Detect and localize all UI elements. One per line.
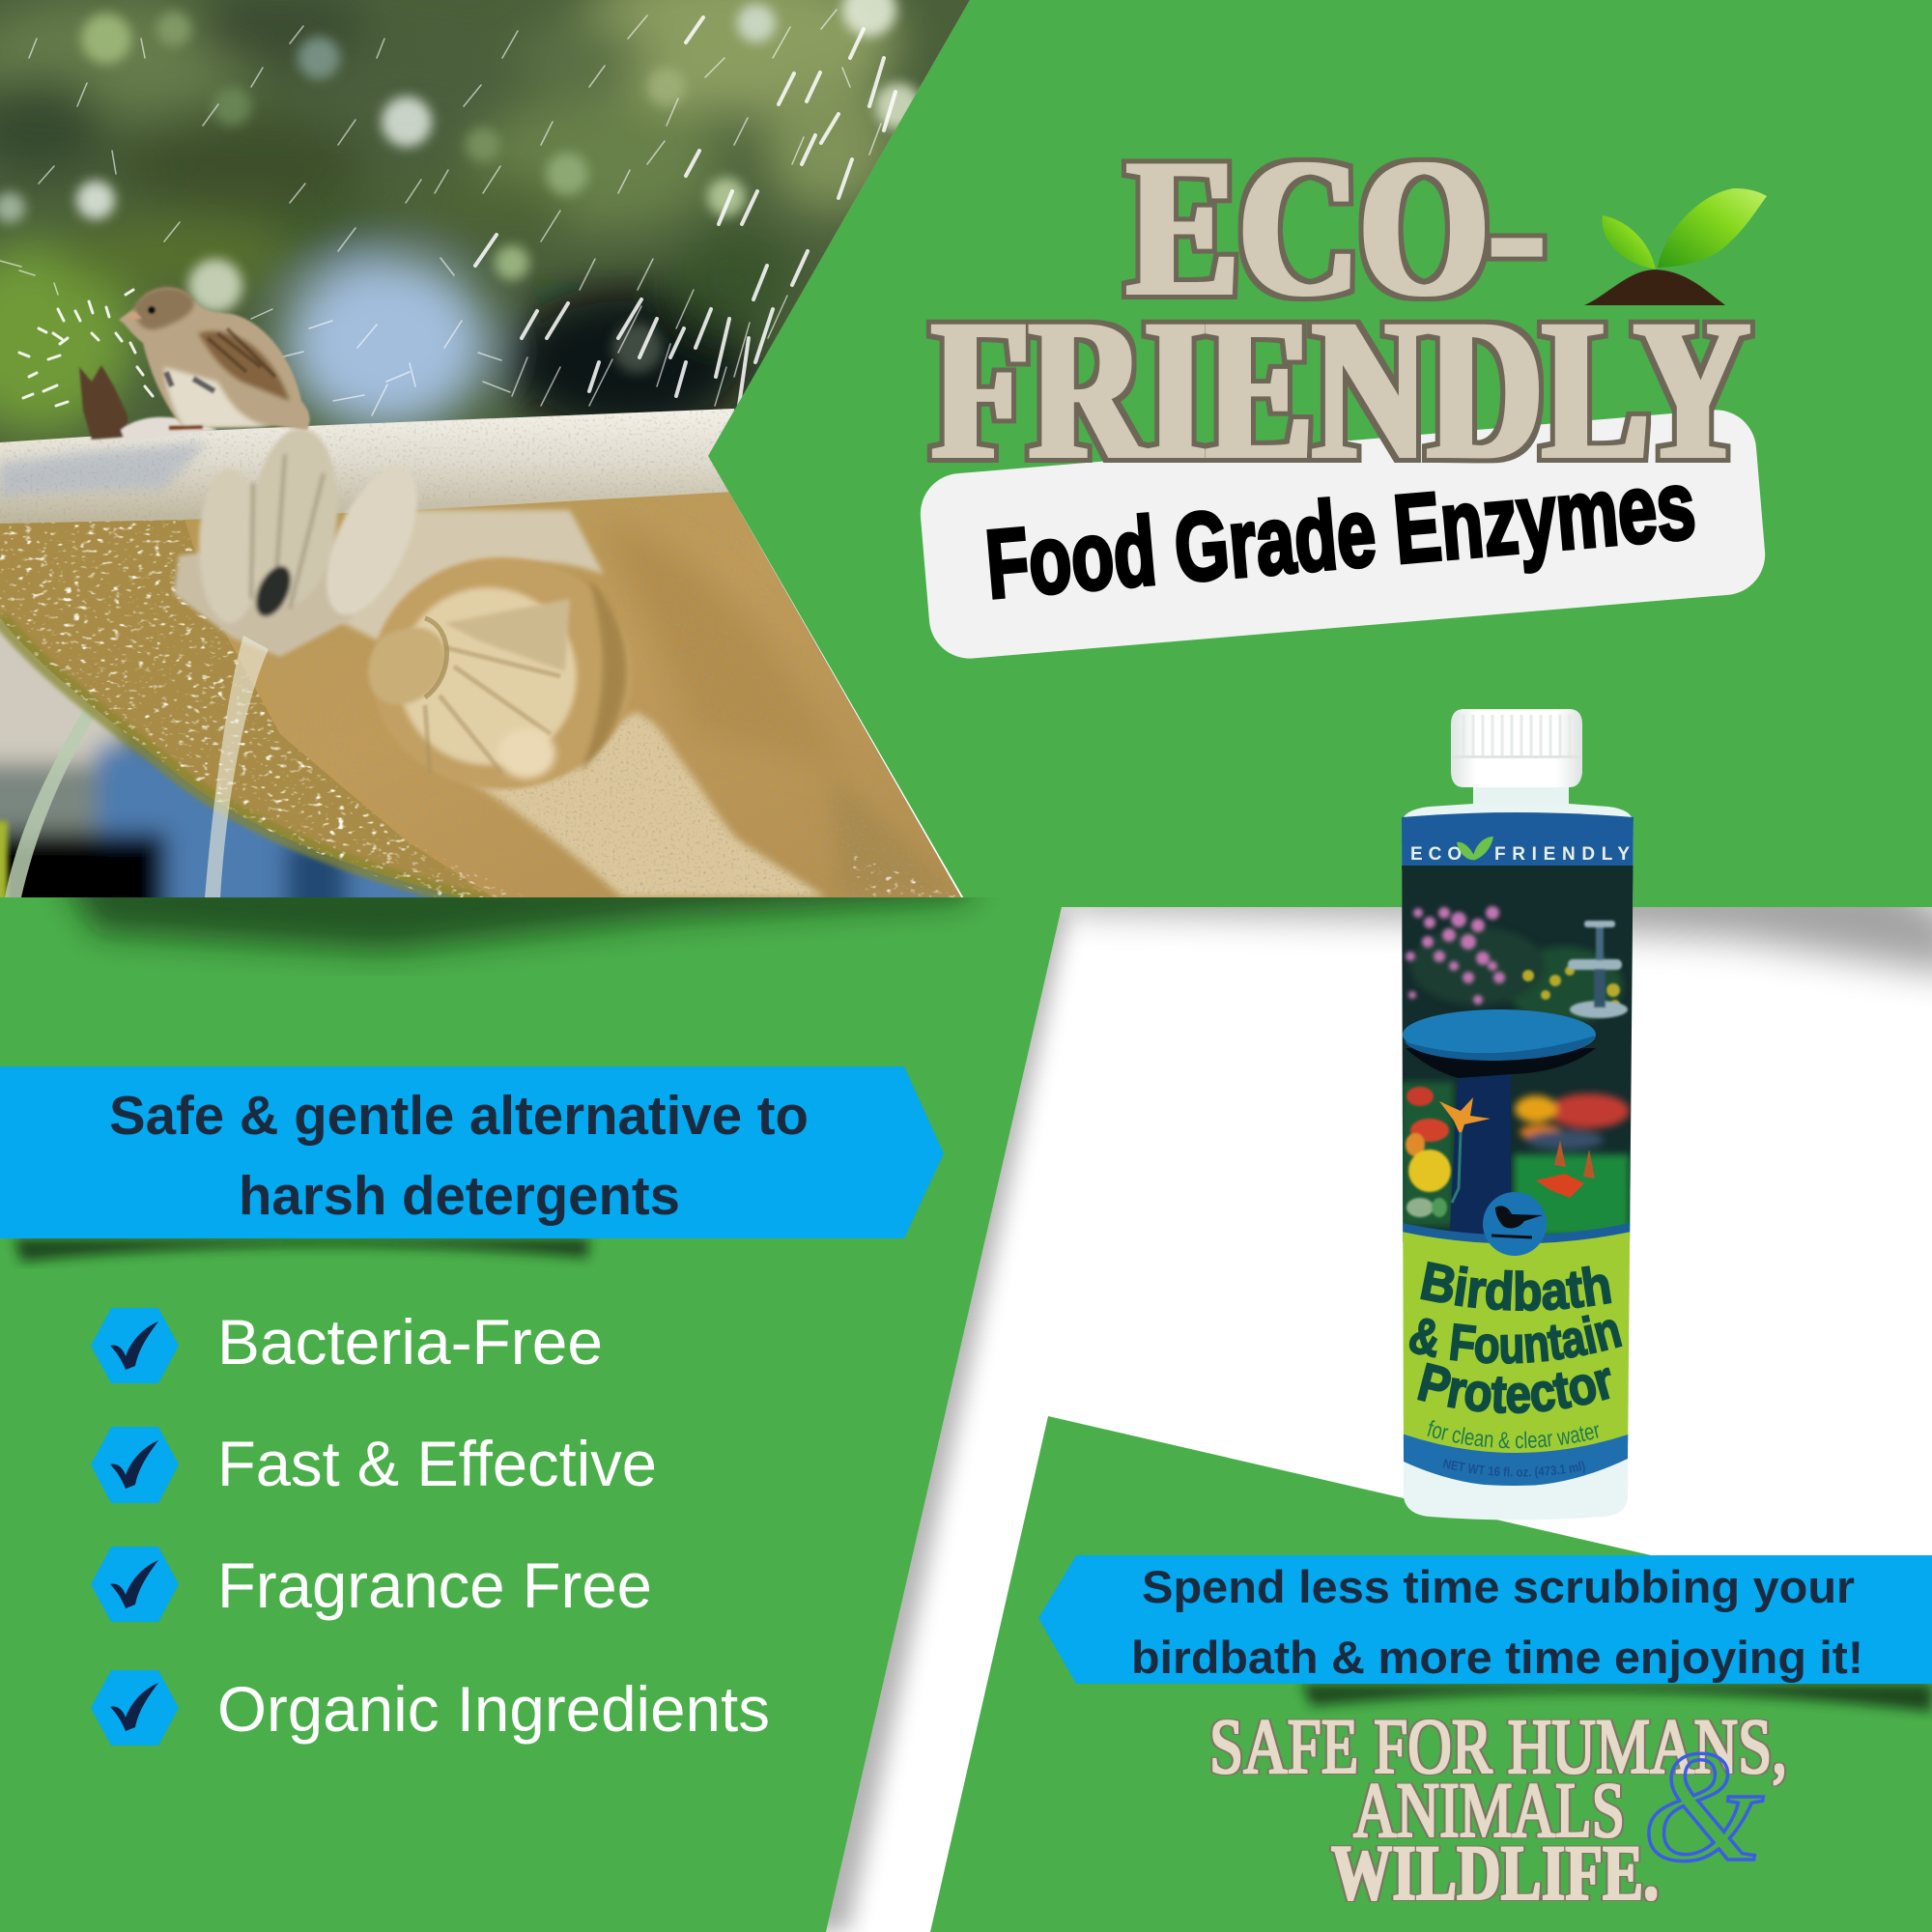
photo: sparrow on fountain basin <box>0 0 976 929</box>
food grade enzymes pill <box>917 407 1769 662</box>
list item 2: Fast & Effective <box>217 1428 657 1499</box>
ampersand: & <box>1642 1718 1764 1894</box>
banner text <box>109 1085 809 1227</box>
icon: sprout <box>1584 188 1767 305</box>
label product name: & Fountain <box>1408 1314 1623 1364</box>
photo: basin rim <box>0 409 749 524</box>
checklist <box>91 1306 770 1746</box>
bottle cap <box>1451 709 1582 809</box>
label top text: FRIENDLY <box>1494 844 1630 865</box>
banner text: birdbath & more time enjoying it! <box>1131 1632 1863 1683</box>
photo: bold water streaks <box>475 17 895 406</box>
label red lilies <box>1536 1174 1584 1198</box>
label product name <box>1408 1262 1623 1414</box>
label orange lily <box>1439 1097 1491 1136</box>
label product name: Birdbath <box>1420 1262 1611 1312</box>
panel: bottom right green background <box>930 1416 1932 1932</box>
safe for humans, animals and wildlife: ANIMALS <box>1353 1766 1625 1854</box>
banner: safe and gentle alternative <box>0 1066 944 1238</box>
banner text: Spend less time scrubbing your <box>1142 1561 1855 1612</box>
photo: basin bowl <box>0 483 976 903</box>
title: eco-friendly: ECO- <box>1127 119 1545 337</box>
bottle body <box>1402 804 1634 1520</box>
photo: sparrow <box>119 288 310 430</box>
photo: lime foliage edge <box>0 821 8 908</box>
icon: check hexagon 3 <box>91 1547 179 1622</box>
photo: main water stream <box>205 636 269 897</box>
bottle product <box>1402 709 1634 1520</box>
shadow: white area soft shadows <box>802 874 1932 1932</box>
icon: check hexagon 2 <box>91 1427 179 1503</box>
shadow: under right banner <box>1301 1684 1932 1712</box>
photo background: bokeh highlights <box>0 0 922 373</box>
banner text: Safe & gentle alternative to <box>109 1085 809 1147</box>
shadow: under left banner <box>14 1238 589 1262</box>
photo background: blurred foliage <box>0 0 898 440</box>
banner text: harsh detergents <box>239 1165 680 1227</box>
label tagline: for clean & clear water <box>1428 1420 1599 1449</box>
label yellow flowers <box>1522 966 1620 1009</box>
label garden scene <box>1401 927 1630 1236</box>
shadow: under photo <box>58 869 976 952</box>
photo: wet speckle texture <box>0 517 541 903</box>
photo: carved scroll ornament <box>333 510 633 789</box>
label lime panel <box>1391 1227 1642 1454</box>
label product name: Protector <box>1417 1362 1611 1414</box>
label birdbath <box>1449 1060 1511 1246</box>
icon: check hexagon 1 <box>91 1308 179 1383</box>
icon: check hexagon 4 <box>91 1670 179 1746</box>
safe for humans, animals and wildlife: WILDLIFE. <box>1331 1829 1659 1917</box>
label top text: ECO <box>1410 844 1467 865</box>
label top text <box>1410 844 1630 865</box>
list item 3: Fragrance Free <box>217 1549 652 1621</box>
photo: rear bird tail <box>79 365 217 442</box>
label leaf logo <box>1457 837 1493 860</box>
list item 4: Organic Ingredients <box>217 1673 770 1745</box>
photo: fine water spray <box>0 10 881 415</box>
label lower-left flowers <box>1406 1087 1451 1217</box>
panel: top right green background <box>708 0 1932 907</box>
bottle label <box>1402 812 1634 1486</box>
banner: spend less time scrubbing <box>1038 1555 1932 1684</box>
safe for humans, animals and wildlife <box>1209 1702 1787 1917</box>
label net weight: NET WT 16 fl. oz. (473.1 ml) <box>1443 1459 1585 1479</box>
title: eco-friendly <box>932 119 1749 500</box>
label bird badge <box>1483 1192 1547 1256</box>
photo: left water stream <box>5 700 97 897</box>
label bottom blue band <box>1391 1430 1642 1486</box>
banner text <box>1131 1561 1863 1683</box>
label pink flowers <box>1406 906 1505 1005</box>
photo: carved fan shell <box>174 425 436 657</box>
photo: lower left background <box>0 618 460 897</box>
list item 1: Bacteria-Free <box>217 1306 603 1378</box>
panel: bottom left green background <box>0 897 1062 1932</box>
label background fountain <box>1568 921 1628 1018</box>
photo: splash around bird tail <box>19 290 153 406</box>
